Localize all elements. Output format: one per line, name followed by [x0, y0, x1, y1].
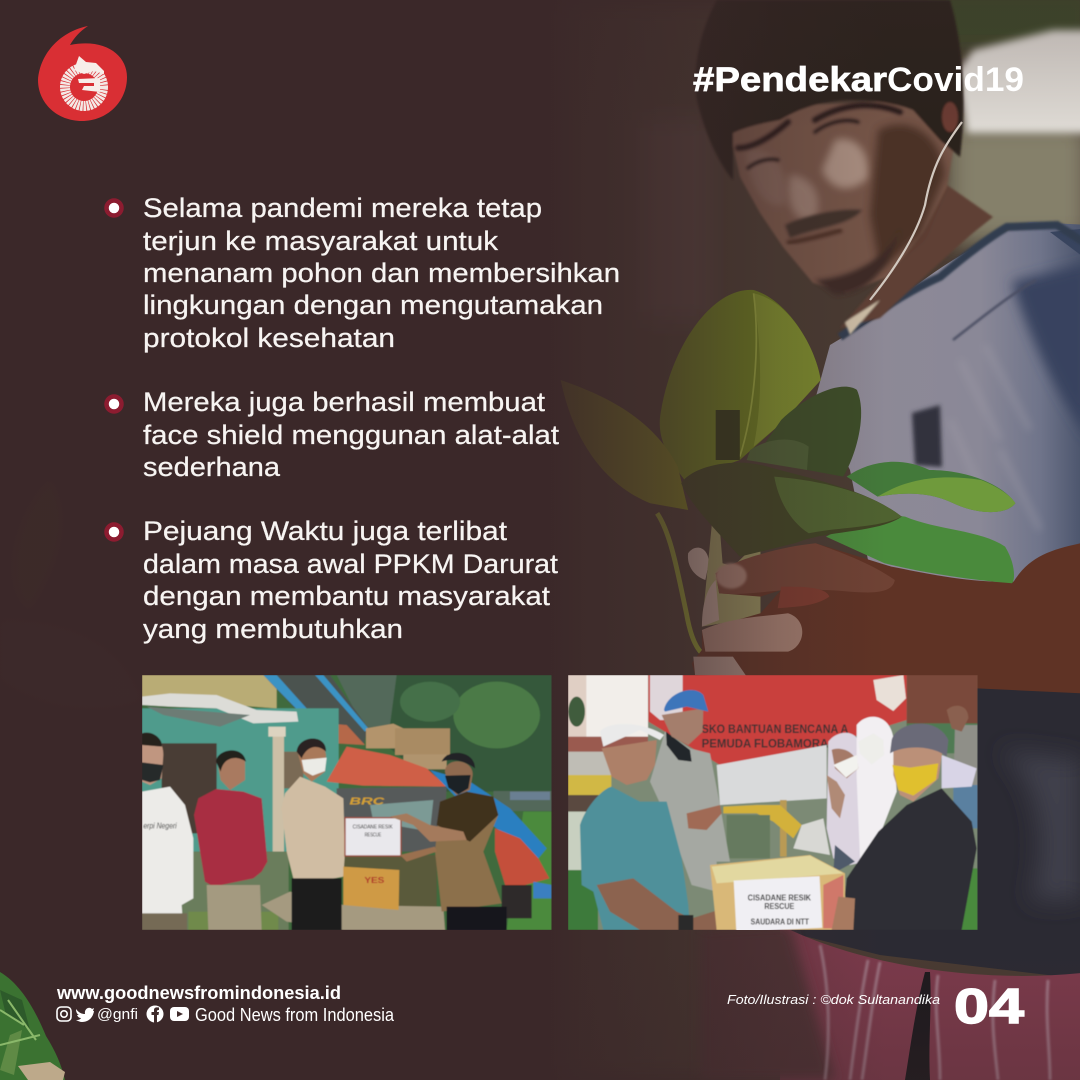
- ear: [942, 102, 958, 132]
- far right man: [954, 724, 978, 786]
- photo 1: handing over aid boxes beside a pickup: erpi Negeri: [143, 821, 177, 830]
- bullet point 1: menanam pohon dan membersihkan: [143, 258, 620, 288]
- donation box: [710, 855, 845, 930]
- bullet point 1: terjun ke masyarakat untuk: [143, 226, 499, 256]
- page name: Good News from Indonesia: [195, 1005, 395, 1025]
- photo 2: men with donation box under red banner: PEMUDA FLOBAMORA: [702, 736, 828, 750]
- bullet point 1: [106, 193, 620, 353]
- arm and hand: [692, 543, 1080, 693]
- bullet point 3: yang membutuhkan: [143, 614, 403, 644]
- man in red shirt: [194, 789, 267, 887]
- page number: 04: [954, 980, 1024, 1034]
- hashtag title: Covid19: [887, 61, 1024, 99]
- stems behind hand: [657, 513, 702, 653]
- bullet point 1: protokol kesehatan: [143, 323, 395, 353]
- orange tarpaulin: [327, 747, 447, 787]
- bullet point 3: Pejuang Waktu juga terlibat: [143, 516, 508, 546]
- left foreground leaves, faint: [0, 480, 140, 708]
- moustache and mouth: [785, 210, 862, 238]
- photo 1: handing over aid boxes beside a pickup: YES: [364, 875, 385, 885]
- photo 1: handing over aid boxes beside a pickup: BRC: [349, 796, 386, 807]
- photo 2: men with donation box under red banner: CISADANE RESIK: [748, 893, 811, 903]
- hashtag title: #Pendekar: [693, 61, 887, 99]
- man in brown shirt: [435, 792, 502, 912]
- yes box: [343, 867, 399, 910]
- photo 1: handing over aid boxes beside a pickup: [142, 675, 552, 930]
- head: neck, face, hair: [696, 0, 993, 335]
- bullet point 1: lingkungan dengan mengutamakan: [143, 290, 603, 320]
- hashtag title: [693, 61, 1024, 99]
- website url: www.goodnewsfromindonesia.id: [56, 982, 341, 1003]
- photo 1: handing over aid boxes beside a pickup: CISADANE RESIK: [353, 824, 393, 830]
- neck: [840, 185, 993, 328]
- bullet point 3: dalam masa awal PPKM Darurat: [143, 549, 559, 579]
- dark green leaf: [754, 387, 861, 477]
- photo 2: men with donation box under red banner: SKO BANTUAN BENCANA A: [702, 722, 848, 736]
- icon: youtube: [170, 1007, 189, 1021]
- footer: website and social handles: [56, 982, 395, 1025]
- handle: @gnfi: [97, 1006, 138, 1023]
- bullet point 3: dengan membantu masyarakat: [143, 581, 551, 611]
- blue cap man: [650, 732, 730, 892]
- upper large leaf: [660, 290, 821, 480]
- bullet list: [106, 193, 620, 644]
- hair: [696, 0, 963, 180]
- right top leaf: [847, 462, 1015, 512]
- man in white shirt: [142, 787, 193, 930]
- bullet point 2: Mereka juga berhasil membuat: [143, 387, 546, 417]
- icon: instagram: [57, 1007, 71, 1021]
- white sign on box: [345, 818, 401, 856]
- bullet point 2: face shield menggunan alat-alat: [143, 420, 560, 450]
- white tent canopy: [717, 745, 827, 805]
- photo 2: men with donation box under red banner: RESCUE: [764, 901, 795, 911]
- photo credit: Foto/Ilustrasi : ©dok Sultanandika: [727, 992, 940, 1007]
- man in khaki uniform: [282, 777, 345, 882]
- photo 2: men with donation box under red banner: [568, 675, 978, 932]
- corner grass photo: [0, 972, 65, 1080]
- bottom right leaf: [826, 516, 1014, 583]
- earphone cable: [870, 122, 962, 300]
- bullet point 1: Selama pandemi mereka tetap: [143, 193, 542, 223]
- logo: red swirl with white garuda G: [38, 26, 127, 121]
- man in black with yellow mask: [845, 788, 977, 930]
- bullet point 3: [106, 516, 559, 644]
- middle leaf: [681, 463, 902, 557]
- photo 1: handing over aid boxes beside a pickup: RESCUE: [365, 832, 381, 838]
- bullet point 2: [106, 387, 560, 482]
- red banner: [648, 675, 907, 765]
- eyes and brows: [738, 105, 900, 168]
- icon: twitter: [76, 1008, 94, 1022]
- leaves and hand: [561, 290, 1080, 693]
- pickup: [337, 787, 447, 852]
- icon: facebook: [146, 1006, 164, 1023]
- bullet point 2: sederhana: [143, 452, 281, 482]
- cardboard boxes: [366, 724, 403, 748]
- shirt and body: [700, 222, 1080, 1080]
- left leaf: [561, 380, 688, 510]
- photo 2: men with donation box under red banner: SAUDARA DI NTT: [751, 918, 809, 927]
- women in hijab: [827, 733, 865, 865]
- face: [730, 100, 955, 295]
- man in teal shirt: [580, 787, 690, 930]
